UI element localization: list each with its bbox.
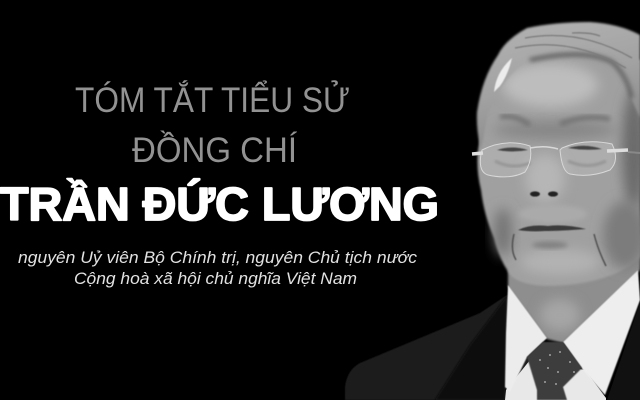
shirt body xyxy=(505,360,606,400)
necktie xyxy=(527,342,582,400)
chin highlight xyxy=(520,249,600,275)
tie dots xyxy=(539,351,575,385)
upper lip xyxy=(519,205,587,223)
title line 1: TÓM TẮT TIỂU SỬ xyxy=(75,80,350,120)
eye bags xyxy=(495,161,606,166)
nostrils xyxy=(530,191,540,197)
jacket lapel xyxy=(435,296,507,400)
right collar xyxy=(563,270,640,395)
jacket right side xyxy=(607,303,640,400)
nose xyxy=(525,154,565,202)
face xyxy=(477,45,640,286)
subtitle line 2: Cộng hoà xã hội chủ nghĩa Việt Nam xyxy=(74,269,357,288)
title line 2: ĐỒNG CHÍ xyxy=(132,130,297,170)
left collar xyxy=(505,285,547,392)
right temple shading xyxy=(622,90,640,210)
portrait: man in suit xyxy=(345,22,640,400)
eyebrow shadow band xyxy=(493,121,617,139)
jaw shading xyxy=(603,201,640,269)
forehead highlight xyxy=(502,63,598,107)
lower lip shadow xyxy=(532,242,568,248)
eyes xyxy=(497,146,602,152)
neck xyxy=(508,235,640,343)
hairline shadow xyxy=(530,54,632,98)
name headline: TRẦN ĐỨC LƯƠNG xyxy=(0,178,439,230)
jacket xyxy=(345,295,540,400)
hair xyxy=(477,22,640,150)
glasses xyxy=(472,142,640,177)
nasolabial fold lines xyxy=(512,234,606,266)
left cheek shading xyxy=(494,208,512,256)
mouth xyxy=(518,225,586,231)
hair highlight xyxy=(494,58,512,92)
neck highlight xyxy=(540,299,580,331)
eyebrows xyxy=(500,116,610,125)
subtitle line 1: nguyên Uỷ viên Bộ Chính trị, nguyên Chủ tịch nước xyxy=(18,248,417,267)
hair streaks xyxy=(515,33,632,68)
